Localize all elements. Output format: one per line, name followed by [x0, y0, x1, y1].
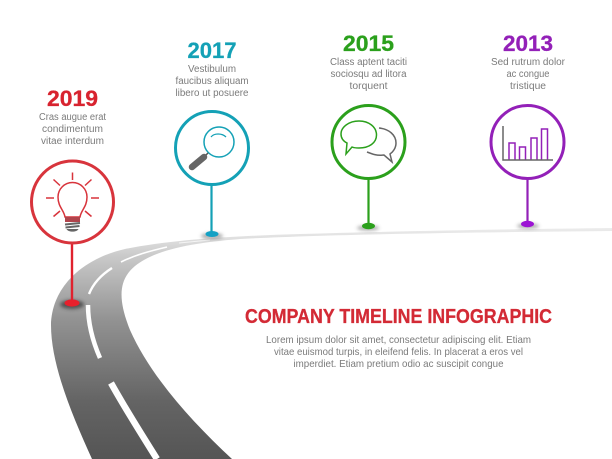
pin 2013 [491, 106, 564, 228]
milestone 2019 [32, 86, 114, 309]
body text: imperdiet. Etiam pretium odio ac suscipit congue [294, 358, 504, 370]
year 2013: 2013 [503, 31, 553, 56]
icon: magnifier [192, 127, 234, 167]
pin 2015 [332, 106, 405, 230]
milestone 2013 [491, 31, 566, 228]
body text: Lorem ipsum dolor sit amet, consectetur adipiscing elit. Etiam [266, 334, 531, 346]
description 2015: torquent [350, 81, 388, 92]
body text: vitae euismod turpis, in eleifend felis. In placerat a eros vel [274, 346, 523, 358]
description 2013 [491, 57, 566, 92]
description 2019: vitae interdum [41, 136, 104, 147]
year 2015: 2015 [343, 31, 394, 56]
pin 2019 [32, 161, 114, 309]
description 2019: condimentum [42, 124, 103, 135]
description 2013: Sed rutrum dolor [491, 57, 566, 68]
description 2013: tristique [510, 81, 546, 92]
description 2017: faucibus aliquam [176, 76, 248, 87]
road centre dashes [88, 240, 210, 459]
description 2013: ac congue [506, 69, 550, 80]
icon: bar chart [503, 126, 553, 160]
description 2015: Class aptent taciti [330, 57, 407, 68]
description 2017: libero ut posuere [176, 88, 249, 99]
description 2017: Vestibulum [188, 64, 236, 75]
description 2017 [176, 64, 249, 99]
icon: speech bubbles [341, 121, 396, 162]
milestone 2015 [330, 31, 407, 230]
icon: light bulb [46, 172, 99, 232]
description 2019 [39, 112, 106, 147]
year 2019: 2019 [47, 86, 98, 111]
title: COMPANY TIMELINE INFOGRAPHIC [245, 306, 552, 328]
description 2015: sociosqu ad litora [330, 69, 407, 80]
road [51, 228, 612, 459]
body text [266, 334, 531, 370]
description 2015 [330, 57, 407, 92]
description 2019: Cras augue erat [39, 112, 106, 123]
milestone 2017 [176, 38, 249, 239]
pin 2017 [176, 112, 248, 239]
year 2017: 2017 [188, 38, 236, 63]
